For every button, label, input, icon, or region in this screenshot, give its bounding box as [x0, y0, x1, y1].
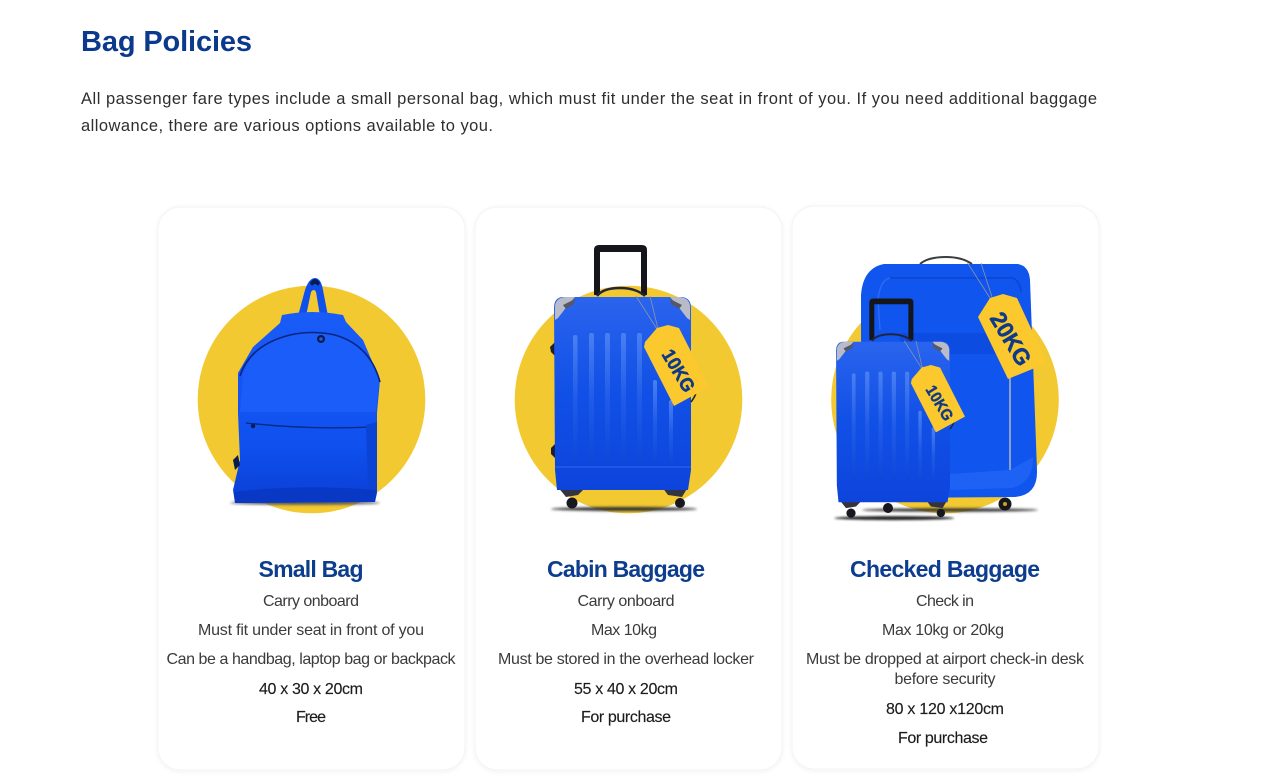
checked baggage details: Check in — [916, 593, 974, 610]
intro paragraph: allowance, there are various options available to you. — [81, 117, 493, 135]
panel: checked baggage — [792, 206, 1099, 769]
icon: cabin suitcase with 10kg tag — [550, 245, 709, 511]
small bag details: Must fit under seat in front of you — [198, 622, 424, 639]
tag label: 20KG: 20KG — [985, 307, 1037, 370]
checked baggage details: Max 10kg or 20kg — [882, 622, 1004, 639]
cabin baggage details — [498, 593, 755, 726]
cabin baggage details: Max 10kg — [591, 622, 657, 639]
yellow circle: checked baggage — [831, 286, 1059, 513]
intro paragraph: All passenger fare types include a small personal bag, which must fit under the seat in front of you. If you need additional baggage — [81, 90, 1097, 108]
yellow circle: cabin baggage — [515, 286, 742, 513]
icon: large checked suitcase with 20kg tag — [861, 257, 1047, 513]
checked baggage details — [806, 593, 1085, 747]
panel: small bag — [158, 207, 465, 770]
small bag details: 40 x 30 x 20cm — [259, 681, 363, 698]
heading: small bag: Small Bag — [258, 556, 364, 582]
heading: cabin baggage: Cabin Baggage — [547, 556, 705, 582]
title: Bag Policies — [81, 26, 252, 58]
panel: cabin baggage — [475, 207, 782, 770]
checked baggage details: Must be dropped at airport check-in desk — [806, 651, 1085, 668]
tag label: 10KG: 10KG — [922, 383, 956, 424]
small bag details: Can be a handbag, laptop bag or backpack — [166, 651, 456, 668]
icon: small cabin suitcase with 10kg tag — [834, 298, 965, 520]
tag label: 10KG: 10KG — [657, 346, 699, 396]
small bag details — [166, 593, 456, 726]
checked baggage details: before security — [894, 671, 996, 688]
heading: checked baggage: Checked Baggage — [850, 556, 1040, 582]
small bag details: Carry onboard — [263, 593, 359, 610]
checked baggage details: 80 x 120 x120cm — [886, 701, 1004, 718]
small bag details: Free — [296, 709, 326, 726]
icon: backpack — [230, 278, 380, 505]
checked baggage details: For purchase — [898, 730, 988, 747]
cabin baggage details: Must be stored in the overhead locker — [498, 651, 755, 668]
cabin baggage details: Carry onboard — [578, 593, 674, 610]
intro paragraph — [81, 90, 1097, 135]
yellow circle: small bag — [198, 286, 425, 513]
cabin baggage details: 55 x 40 x 20cm — [574, 681, 678, 698]
cabin baggage details: For purchase — [581, 709, 671, 726]
